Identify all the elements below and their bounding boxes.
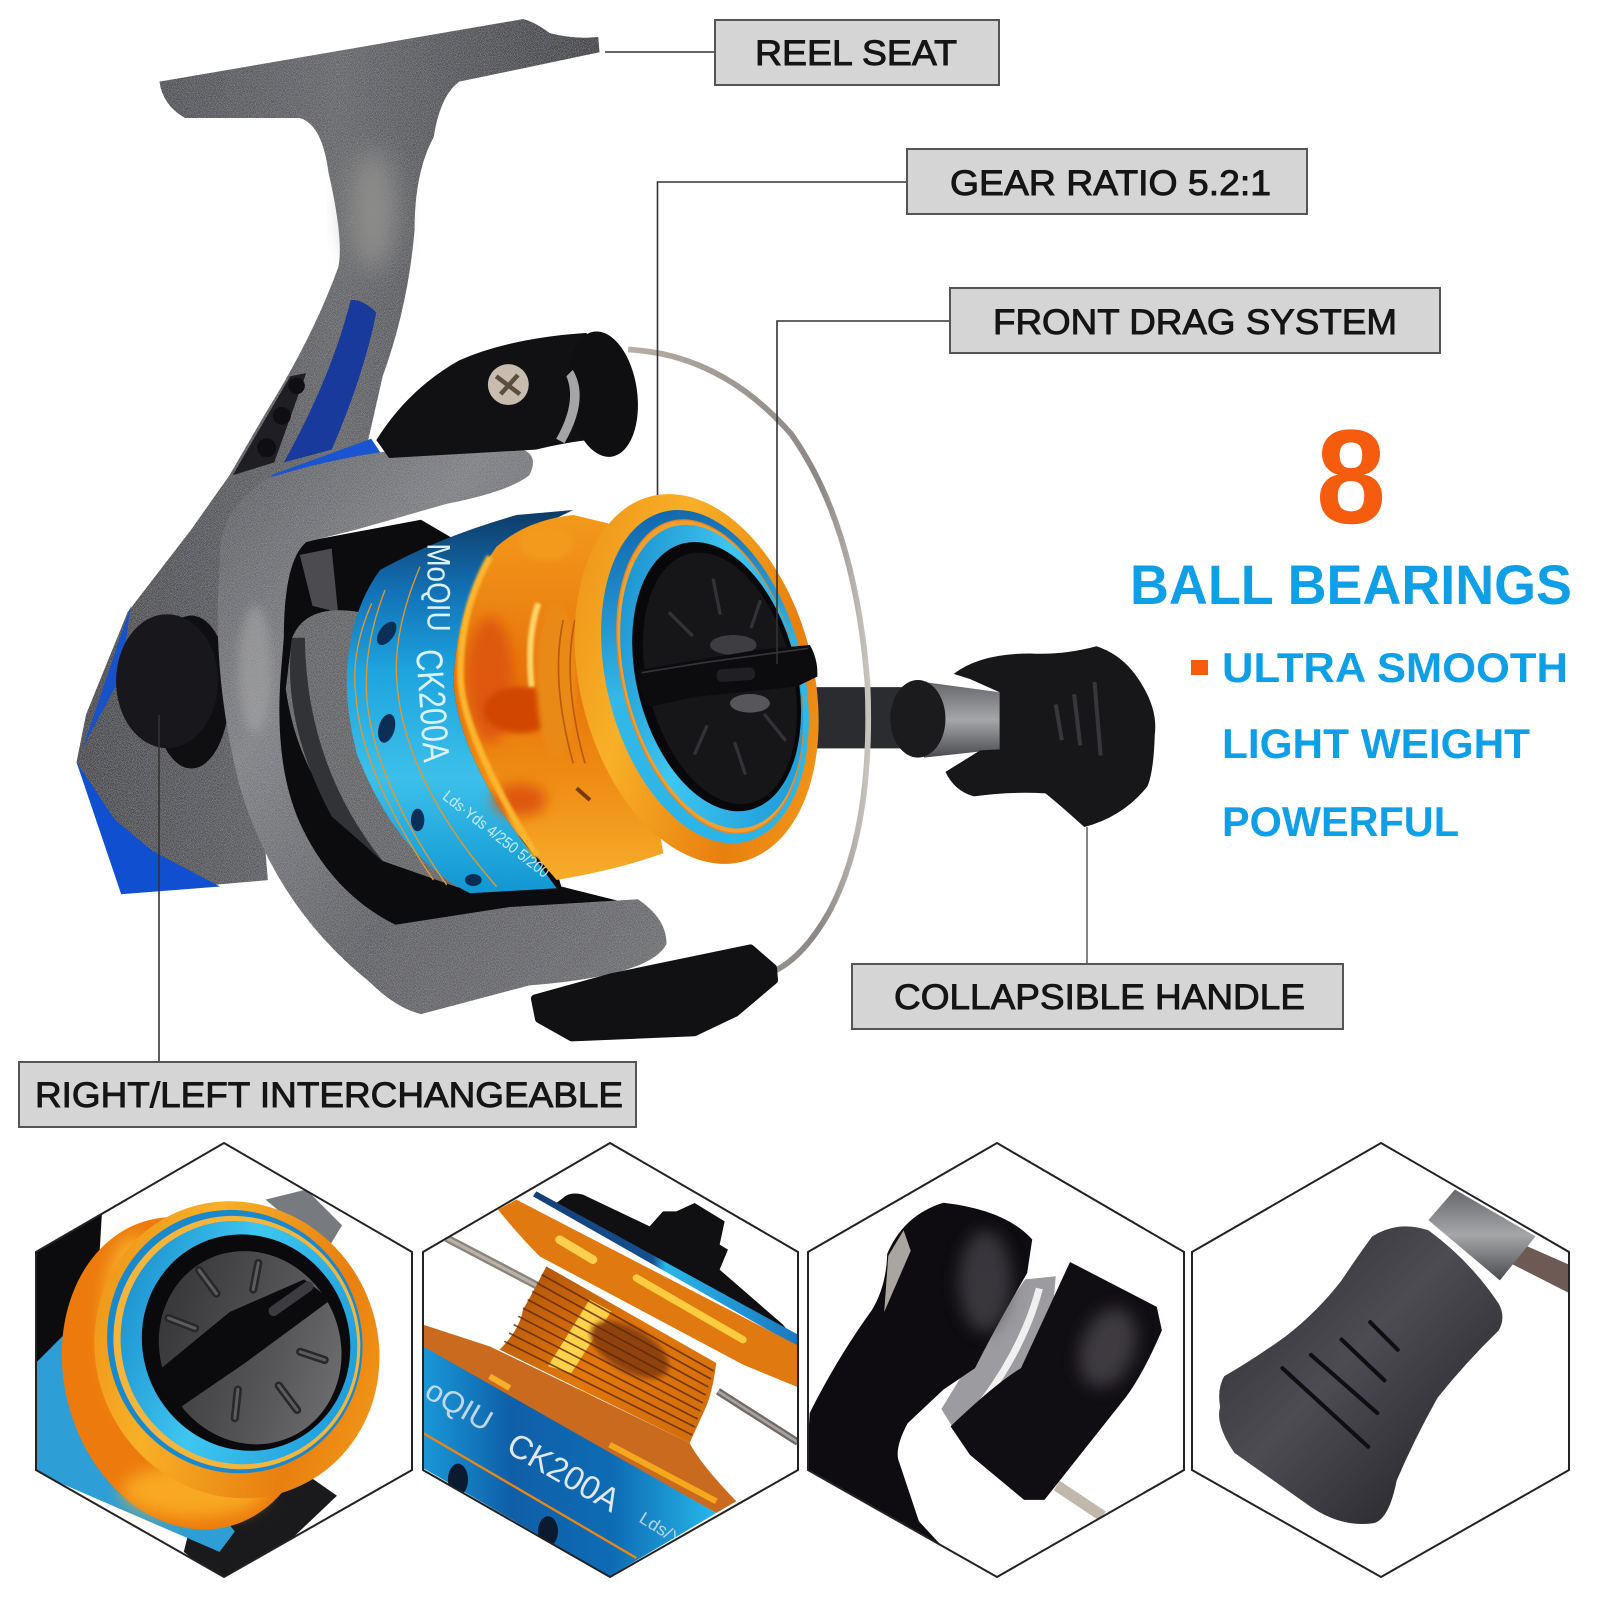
spool model text: Lds·Yds 4/250 5/200 <box>439 788 552 882</box>
feature list: LIGHT WEIGHT <box>1222 720 1530 767</box>
bail arm, screw and wire <box>376 327 868 971</box>
callout: reel seat <box>605 20 999 85</box>
feature list <box>1222 644 1568 845</box>
spool side text <box>420 1374 686 1550</box>
callout: gear ratio: GEAR RATIO 5.2:1 <box>950 164 1271 203</box>
callout: front drag system: FRONT DRAG SYSTEM <box>993 303 1397 342</box>
callout: collapsible handle <box>852 827 1343 1029</box>
main product: spinning reel <box>77 19 1155 1037</box>
bullet marker <box>1191 660 1208 675</box>
detail hexagon: handle grip <box>1192 1143 1572 1577</box>
spool model text: CK200A <box>408 648 458 764</box>
rotor frame <box>218 446 667 1014</box>
callout: reel seat: REEL SEAT <box>755 34 957 73</box>
handle shaft and grip <box>801 646 1155 827</box>
spool model text <box>408 543 552 882</box>
spool side text: CK200A <box>501 1426 627 1520</box>
lower bail arm <box>535 949 774 1037</box>
spool <box>347 468 855 893</box>
callout: collapsible handle: COLLAPSIBLE HANDLE <box>894 978 1305 1017</box>
spool side text: Lds/Y <box>636 1508 686 1550</box>
callout: right/left interchangeable: RIGHT/LEFT INTERCHANGEABLE <box>35 1076 623 1115</box>
reel body and stem <box>77 19 600 894</box>
feature list: POWERFUL <box>1222 798 1459 845</box>
spool model text: MoQIU <box>420 543 456 632</box>
callout: gear ratio <box>658 149 1307 495</box>
detail hexagon: spool side <box>420 1143 800 1577</box>
spool side text: oQIU <box>420 1374 498 1438</box>
callout: front drag system <box>777 288 1440 664</box>
detail hexagon: bail arm joint <box>807 1143 1184 1593</box>
black rotor and inner cylinder <box>268 520 638 931</box>
detail hexagon: spool front <box>28 1143 428 1593</box>
drag knob <box>638 580 817 773</box>
feature list: ULTRA SMOOTH <box>1222 644 1568 691</box>
ball bearing count: 8 <box>1316 403 1386 552</box>
callout: right/left interchangeable <box>19 715 636 1127</box>
heading: ball bearings: BALL BEARINGS <box>1130 553 1572 616</box>
